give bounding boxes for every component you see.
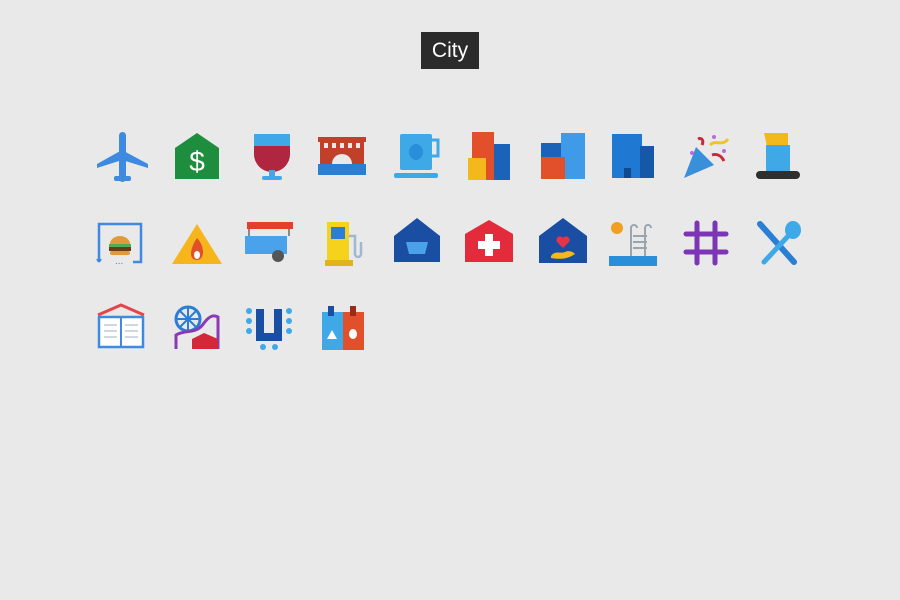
icon: hashtag [686,223,726,263]
icon: party popper [684,135,728,178]
icon: shop basket [394,218,440,262]
icon: wine glass [254,134,290,180]
icon: amusement park [176,307,218,349]
icon: hospital [465,220,513,262]
icon: menu burger: ... [115,256,123,267]
icon: price tag: $ [189,146,205,177]
icon: airplane [97,132,148,182]
icon: library [98,305,144,347]
icon: knife and spoon [760,221,801,262]
icon: hotel [612,134,654,178]
icon: food cart [245,222,293,262]
icon: charity home [539,218,587,263]
icon: campfire [172,224,222,264]
icon: ticket hand [756,133,800,179]
icon: office buildings [541,133,585,179]
icon: bridge [318,137,366,175]
icon: gas pump [325,222,361,266]
icon: pool [609,222,657,266]
title: City [432,39,468,62]
icon: conference table [246,308,292,350]
icon: city buildings [468,132,510,180]
title [421,32,479,69]
icon: cup [394,134,438,178]
icon: price tag [175,133,219,179]
icon: restrooms [322,306,364,350]
icon: menu burger [97,224,141,267]
